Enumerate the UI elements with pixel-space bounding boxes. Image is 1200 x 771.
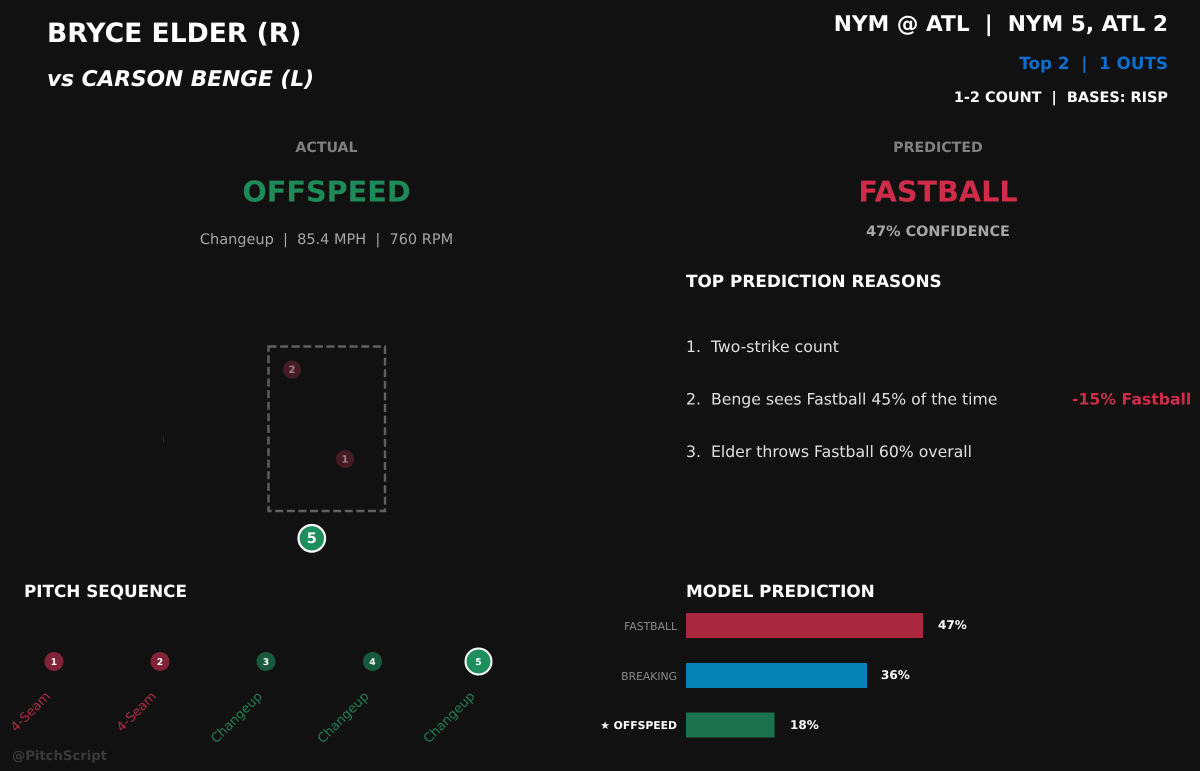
sequence pitch 5: Changeup	[421, 689, 478, 747]
panel: predicted pitch: 47% CONFIDENCE	[866, 224, 1010, 240]
sequence pitch 4: 4	[369, 657, 376, 668]
chart: strike zone	[163, 346, 385, 552]
pitch marker 5	[298, 525, 325, 552]
bar: offspeed: ★ OFFSPEED	[600, 719, 677, 732]
panel: prediction reasons: TOP PREDICTION REASONS	[686, 271, 942, 291]
panel: pitch sequence: PITCH SEQUENCE	[24, 581, 187, 601]
panel: prediction reasons	[686, 271, 1191, 461]
sequence pitch 4	[315, 652, 382, 747]
panel: predicted pitch: PREDICTED	[893, 140, 983, 156]
bar: breaking	[621, 663, 910, 688]
bar: breaking: 36%	[881, 668, 910, 682]
panel: prediction reasons: 1. Two-strike count	[686, 337, 839, 356]
panel: model prediction: MODEL PREDICTION	[686, 581, 875, 601]
sequence pitch 2: 4-Seam	[114, 689, 160, 735]
sequence pitch 4: Changeup	[315, 689, 372, 747]
panel: model prediction	[600, 581, 967, 738]
bar: fastball: 47%	[938, 618, 967, 632]
sequence pitch 1: 1	[51, 657, 57, 668]
pitch marker 1: 1	[342, 454, 349, 466]
sequence pitch 3	[208, 652, 276, 747]
pitch marker 2	[283, 360, 301, 378]
panel: actual pitch: OFFSPEED	[242, 174, 411, 208]
bar: breaking: BREAKING	[621, 670, 677, 683]
pitch marker 1	[336, 450, 354, 468]
bar: fastball	[624, 613, 967, 638]
sequence pitch 3: 3	[263, 657, 269, 668]
pitch marker 5: 5	[307, 531, 317, 547]
bar: fastball: FASTBALL	[624, 620, 677, 633]
sequence pitch 5	[421, 648, 492, 747]
bar: offspeed	[600, 712, 819, 738]
sequence pitch 2: 2	[157, 657, 163, 668]
subtitle: batter: vs CARSON BENGE (L)	[47, 67, 314, 92]
pitch marker 2: 2	[289, 365, 296, 376]
panel: prediction reasons: 2. Benge sees Fastball 45% of the time	[686, 390, 997, 408]
inning and outs: Top 2 | 1 OUTS	[1019, 53, 1168, 73]
title: pitcher: BRYCE ELDER (R)	[47, 18, 301, 49]
sequence pitch 5: 5	[475, 657, 482, 668]
sequence pitch 1	[8, 652, 64, 735]
panel: pitch sequence	[8, 581, 492, 747]
bar: offspeed: 18%	[790, 718, 819, 732]
count and bases: 1-2 COUNT | BASES: RISP	[954, 90, 1168, 106]
panel: prediction reasons: -15% Fastball	[1072, 390, 1191, 408]
watermark: @PitchScript	[12, 749, 107, 764]
sequence pitch 1: 4-Seam	[8, 689, 54, 735]
panel: actual pitch: Changeup | 85.4 MPH | 760 RPM	[200, 232, 453, 248]
game score: NYM @ ATL | NYM 5, ATL 2	[834, 12, 1168, 37]
sequence pitch 2	[114, 652, 170, 735]
sequence pitch 3: Changeup	[208, 689, 266, 747]
panel: predicted pitch: FASTBALL	[858, 174, 1018, 208]
panel: actual pitch: ACTUAL	[295, 140, 358, 156]
panel: actual pitch	[200, 140, 453, 248]
panel: predicted pitch	[858, 140, 1018, 240]
panel: prediction reasons: 3. Elder throws Fastball 60% overall	[686, 442, 972, 461]
